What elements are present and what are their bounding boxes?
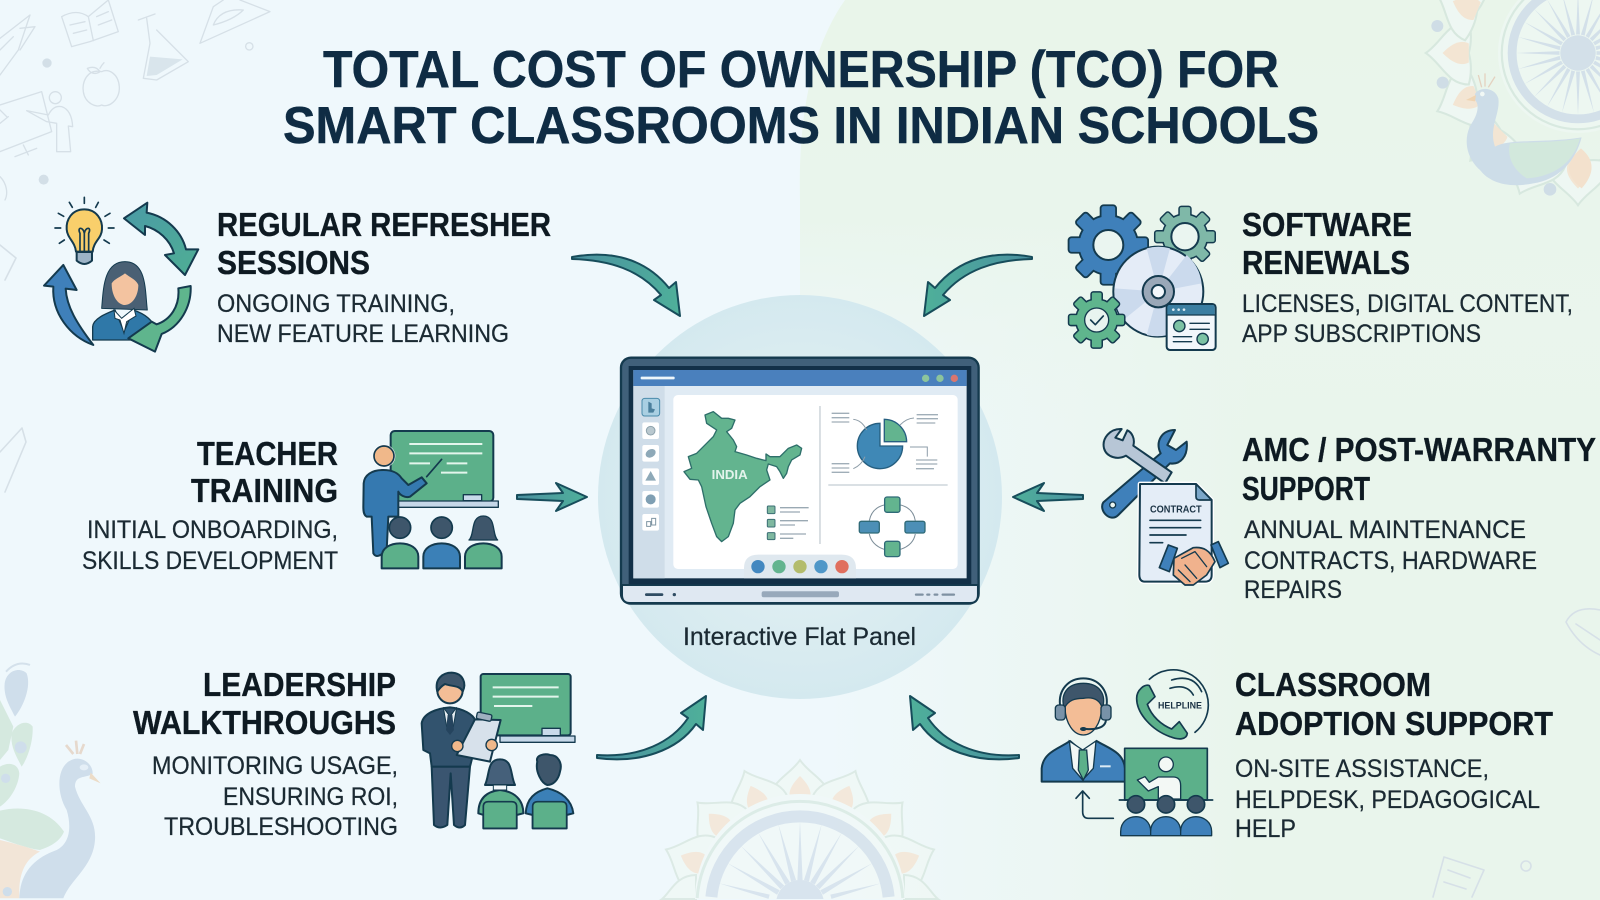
description: SKILLS DEVELOPMENT <box>82 547 338 575</box>
heading: REGULAR REFRESHER <box>217 206 551 243</box>
heading <box>1242 206 1412 281</box>
arrow: software renewals to panel <box>924 255 1032 316</box>
description: INITIAL ONBOARDING, <box>87 516 338 544</box>
heading <box>217 206 551 281</box>
description <box>1242 290 1573 348</box>
heading: SESSIONS <box>217 244 370 281</box>
panel: teacher training <box>82 431 502 575</box>
heading <box>191 435 338 509</box>
description: NEW FEATURE LEARNING <box>217 320 509 348</box>
panel: classroom adoption support <box>1042 666 1553 843</box>
India map <box>684 412 802 542</box>
description: ANNUAL MAINTENANCE <box>1244 516 1526 544</box>
heading: WALKTHROUGHS <box>133 704 396 741</box>
icon: tools, contract and handshake: CONTRACT <box>1150 504 1202 515</box>
arrow: AMC support to panel <box>1013 483 1083 511</box>
icon: teacher at board with students <box>363 431 502 568</box>
description: APP SUBSCRIPTIONS <box>1242 320 1481 348</box>
icon: helpdesk agent, helpline and classroom <box>1042 670 1213 836</box>
heading: LEADERSHIP <box>203 666 396 703</box>
background decoration: chakra and lotus bottom <box>655 760 945 899</box>
description: MONITORING USAGE, <box>152 752 398 780</box>
icon: gears, disc and app window <box>1069 206 1216 350</box>
map legend <box>767 506 809 540</box>
description: REPAIRS <box>1244 576 1342 604</box>
description: ENSURING ROI, <box>223 783 398 811</box>
description <box>82 516 338 575</box>
heading <box>1242 431 1596 507</box>
panel: AMC / post-warranty support <box>1102 429 1596 604</box>
interactive flat panel <box>621 358 979 604</box>
sidebar buttons <box>642 398 660 531</box>
heading <box>1235 666 1553 742</box>
description <box>152 752 398 841</box>
cycle diagram <box>859 497 925 557</box>
panel: leadership walkthroughs <box>133 666 575 841</box>
heading: RENEWALS <box>1242 244 1410 281</box>
heading <box>133 666 396 741</box>
description: ONGOING TRAINING, <box>217 290 455 318</box>
description <box>1244 516 1537 604</box>
description <box>217 290 509 348</box>
description: CONTRACTS, HARDWARE <box>1244 547 1537 575</box>
description: HELPDESK, PEDAGOGICAL <box>1235 786 1540 814</box>
title: SMART CLASSROOMS IN INDIAN SCHOOLS <box>283 97 1319 155</box>
heading: SOFTWARE <box>1242 206 1412 243</box>
description: LICENSES, DIGITAL CONTENT, <box>1242 290 1573 318</box>
background decoration: chakra and peacock top right <box>1425 0 1600 206</box>
panel label: Interactive Flat Panel <box>683 623 916 651</box>
arrow: refresher sessions to panel <box>572 255 680 316</box>
description: HELP <box>1235 815 1296 843</box>
arrow: leadership walkthroughs to panel <box>597 696 706 759</box>
icon: tools, contract and handshake <box>1102 429 1228 585</box>
arrow: classroom adoption to panel <box>910 696 1019 759</box>
India map: INDIA <box>712 467 748 482</box>
icon: leader with clipboard and students <box>422 673 575 828</box>
heading: ADOPTION SUPPORT <box>1235 705 1553 742</box>
heading: TRAINING <box>191 472 338 509</box>
icon: bulb, learner and cycle arrows <box>44 197 198 352</box>
background decoration: right and lower doodles <box>0 245 1600 897</box>
heading: TEACHER <box>197 435 338 472</box>
toolbar <box>744 555 856 578</box>
icon: helpdesk agent, helpline and classroom: HELPLINE <box>1158 701 1202 711</box>
panel: software renewals <box>1069 206 1573 350</box>
title: TOTAL COST OF OWNERSHIP (TCO) FOR <box>323 41 1279 99</box>
description: TROUBLESHOOTING <box>164 813 398 841</box>
arrow: teacher training to panel <box>517 483 587 511</box>
heading: CLASSROOM <box>1235 666 1431 703</box>
heading: SUPPORT <box>1242 470 1370 507</box>
background decoration: peacock bottom left <box>0 663 101 898</box>
description <box>1235 755 1540 843</box>
background decoration: school doodles <box>0 0 270 200</box>
description: ON-SITE ASSISTANCE, <box>1235 755 1489 783</box>
panel: regular refresher sessions <box>44 197 551 352</box>
centre circle <box>598 295 1002 699</box>
title <box>283 41 1319 155</box>
pie chart <box>832 413 938 472</box>
